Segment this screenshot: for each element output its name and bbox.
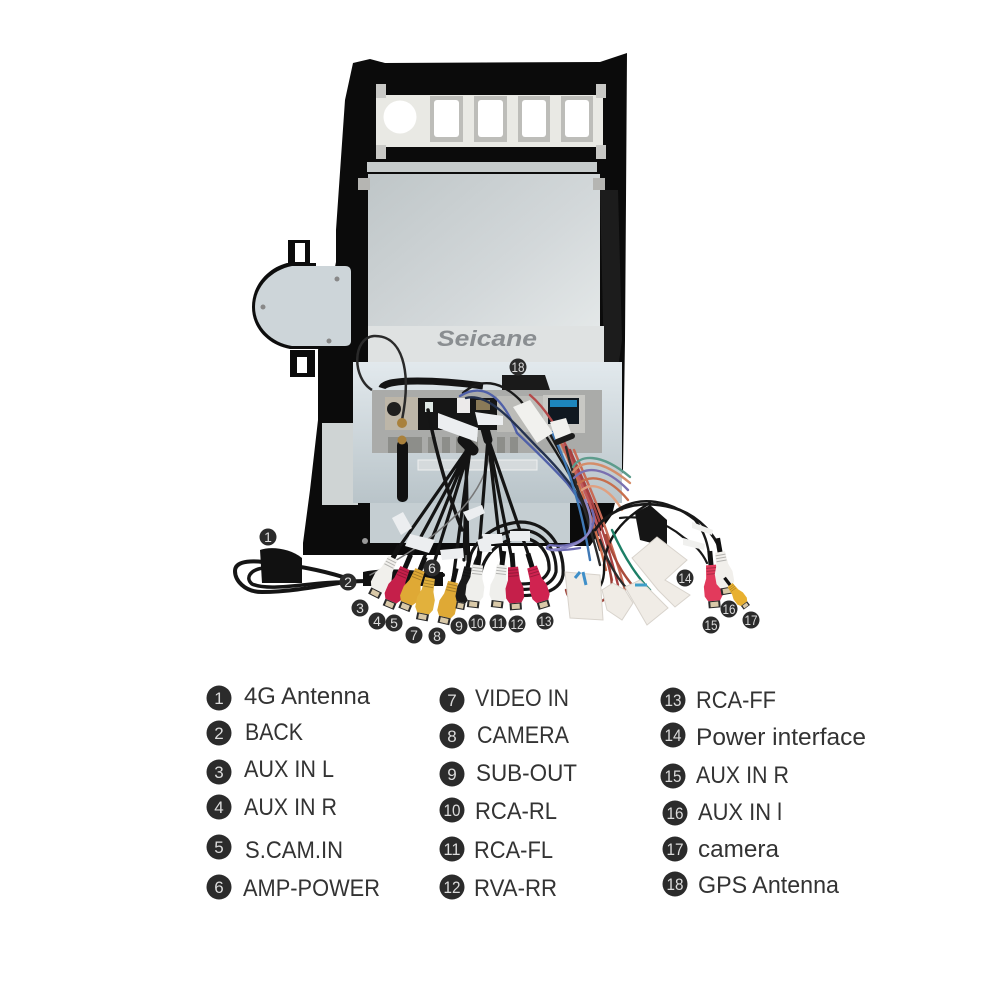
marker 4	[368, 612, 386, 630]
marker 5	[386, 614, 402, 632]
legend item 1: 1	[214, 689, 224, 708]
legend item 5: 5	[214, 838, 224, 857]
connector 12	[503, 552, 525, 611]
legend item 7: VIDEO IN	[475, 685, 569, 712]
legend item 7: 7	[447, 691, 457, 710]
marker 4: 4	[373, 613, 381, 629]
legend item 3: AUX IN L	[244, 756, 334, 783]
legend item 14: 14	[664, 726, 682, 745]
marker 7	[406, 626, 422, 644]
legend item 13	[660, 687, 776, 714]
marker 1: 1	[264, 529, 272, 545]
marker 11: 11	[492, 615, 505, 631]
connector 8	[435, 566, 465, 626]
panel: silver back cover	[368, 174, 600, 364]
legend item 17: 17	[666, 840, 684, 859]
coiled cable	[467, 522, 563, 596]
legend item 18: 18	[666, 875, 684, 894]
harness sleeves	[513, 400, 553, 443]
legend item 3	[206, 756, 334, 784]
legend item 9: 9	[447, 765, 457, 784]
logo: Seicane: Seicane	[437, 326, 537, 351]
legend item 10	[440, 798, 557, 825]
legend item 9: SUB-OUT	[476, 760, 577, 787]
panel: main metal box	[353, 362, 622, 503]
marker 17: 17	[744, 612, 758, 628]
legend item 16: AUX IN l	[698, 799, 782, 826]
legend item 8: 8	[447, 727, 457, 746]
legend item 12: 12	[444, 878, 460, 897]
legend item 4: 4	[214, 798, 224, 817]
legend item 17	[662, 836, 780, 863]
panel: left foil plate	[322, 423, 358, 505]
marker 6	[424, 560, 440, 576]
connector 17	[720, 574, 751, 611]
legend item 3: 3	[214, 763, 224, 782]
photo markers	[260, 358, 760, 644]
antenna and cable bundles	[235, 383, 720, 606]
connector 10	[464, 550, 489, 609]
rca connectors	[365, 537, 751, 626]
legend item 8: CAMERA	[477, 722, 569, 749]
gps antenna cable	[357, 336, 408, 502]
marker 9	[450, 618, 468, 634]
marker 10: 10	[470, 615, 484, 631]
line out bundle wires	[478, 425, 532, 565]
legend item 2: BACK	[245, 719, 303, 746]
marker 8	[428, 628, 446, 644]
connector 3	[365, 541, 407, 600]
legend item 15	[660, 762, 789, 789]
legend item 14: Power interface	[696, 724, 866, 751]
marker 7: 7	[410, 627, 418, 643]
AV bundle wires	[393, 440, 473, 580]
connector 4	[380, 552, 419, 611]
GPS plug wire	[428, 410, 462, 530]
labels on wires	[392, 412, 530, 560]
legend item 8	[440, 722, 569, 749]
panel: connector plate	[372, 390, 602, 470]
marker 2	[340, 574, 356, 590]
legend	[206, 683, 866, 902]
marker 18: 18	[512, 359, 525, 375]
panel: black car bezel	[303, 53, 627, 555]
panel: side plate	[252, 240, 351, 377]
legend item 4: AUX IN R	[244, 794, 337, 821]
device photo	[252, 53, 627, 555]
connector 13	[519, 551, 553, 611]
legend item 10: 10	[444, 801, 460, 820]
legend item 16: 16	[666, 804, 684, 823]
legend item 6: 6	[214, 878, 224, 897]
connector 5	[396, 554, 434, 613]
wiring harness	[460, 383, 720, 606]
marker 5: 5	[390, 615, 398, 631]
marker 3: 3	[356, 600, 364, 616]
legend item 18: GPS Antenna	[698, 872, 840, 899]
legend item 12: RVA-RR	[474, 875, 557, 902]
legend item 15: 15	[664, 767, 682, 786]
marker 14: 14	[678, 570, 692, 586]
legend item 7	[440, 685, 569, 712]
marker 12: 12	[510, 616, 524, 632]
legend item 13: 13	[664, 691, 682, 710]
connector 7	[413, 563, 442, 622]
marker 1	[260, 528, 276, 546]
panel: button bracket	[376, 84, 606, 159]
legend item 5: S.CAM.IN	[245, 837, 343, 864]
connector 15	[701, 550, 724, 609]
legend item 11: RCA-FL	[474, 837, 553, 864]
legend item 17: camera	[698, 836, 780, 863]
gps module	[502, 375, 550, 390]
legend item 2: 2	[214, 724, 224, 743]
marker 3	[352, 600, 368, 616]
marker 15: 15	[704, 617, 718, 633]
legend item 2	[206, 719, 303, 746]
silver strip	[367, 162, 597, 172]
connector 11	[488, 550, 513, 609]
power connectors	[565, 505, 690, 625]
panel: lower box	[370, 503, 570, 543]
legend item 1: 4G Antenna	[244, 683, 371, 710]
legend item 12	[440, 874, 557, 902]
legend item 6: AMP-POWER	[243, 875, 380, 902]
legend item 16	[662, 799, 782, 826]
rear cable	[382, 381, 483, 388]
legend item 15: AUX IN R	[696, 762, 789, 789]
connector 9	[453, 552, 477, 610]
marker 16: 16	[722, 601, 736, 617]
marker 13: 13	[538, 613, 552, 629]
marker 8: 8	[433, 628, 441, 644]
legend item 5	[206, 834, 343, 864]
connector 16	[709, 537, 736, 596]
legend item 4	[206, 794, 337, 821]
marker 6: 6	[428, 560, 436, 576]
marker 9: 9	[455, 618, 463, 634]
legend item 13: RCA-FF	[696, 687, 776, 714]
legend item 11	[440, 836, 553, 864]
legend item 10: RCA-RL	[475, 798, 557, 825]
marker 2: 2	[344, 574, 352, 590]
legend item 11: 11	[444, 840, 460, 859]
4G antenna cable	[235, 548, 443, 592]
right bezel inner detail	[600, 190, 622, 362]
